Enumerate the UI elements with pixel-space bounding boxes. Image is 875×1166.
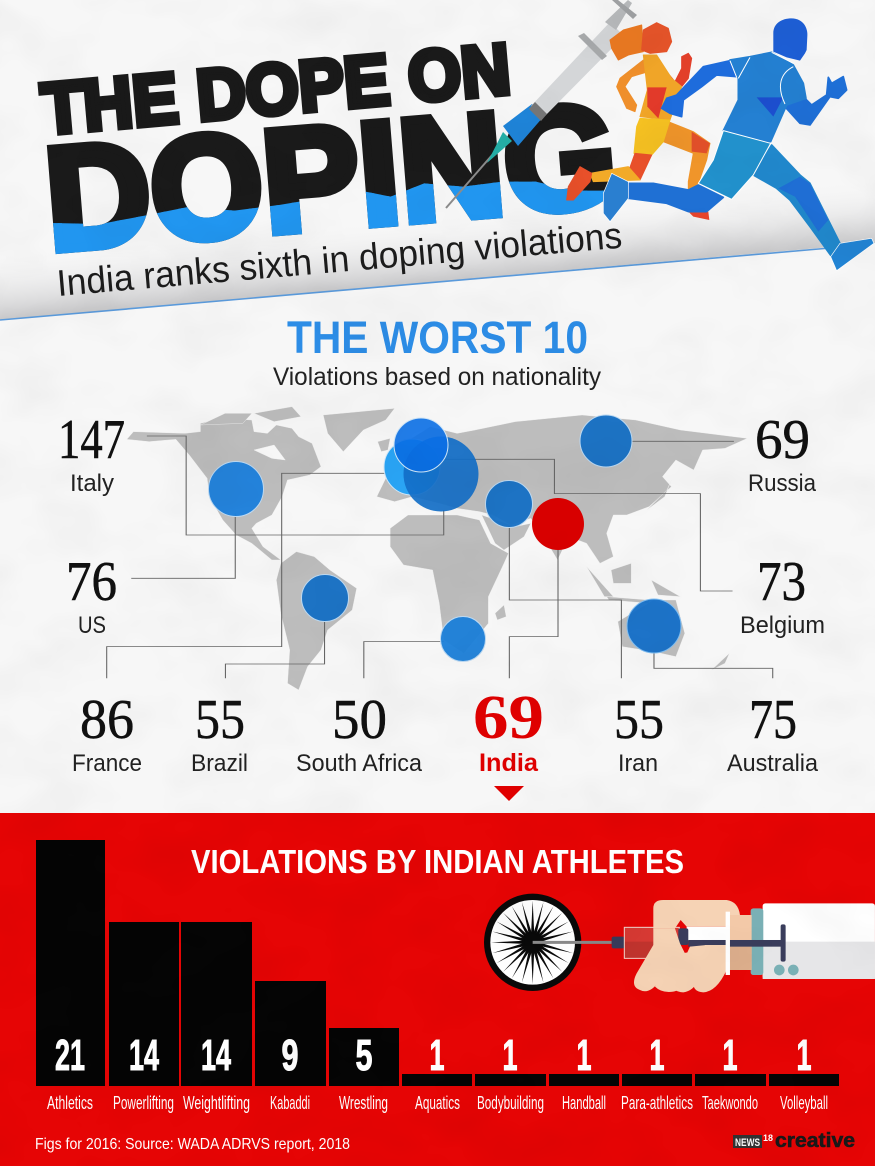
title: [37, 40, 613, 254]
icon: male runner: [603, 18, 874, 271]
stat: Italy: Italy: [70, 470, 114, 497]
blue band edge line: [0, 248, 830, 320]
bar: Para-athletics: Para-athletics: [621, 1093, 693, 1113]
icon: hand: [634, 900, 740, 992]
panel heading: VIOLATIONS BY INDIAN ATHLETES: [191, 843, 684, 880]
stat: Brazil: Brazil: [191, 750, 248, 777]
stat: South Africa: South Africa: [296, 750, 423, 777]
arrow: india pointer: [494, 786, 524, 801]
world map: [127, 407, 747, 690]
bar: Athletics: Athletics: [47, 1093, 93, 1113]
bar: Bodybuilding: 1: [502, 1031, 518, 1080]
bar: Kabaddi: [255, 981, 326, 1113]
bubble: India: [532, 498, 584, 550]
logo: news18 creative: creative: [775, 1130, 855, 1152]
bar: Volleyball: Volleyball: [780, 1093, 828, 1113]
stat: Brazil: 55: [195, 689, 245, 751]
bar: Wrestling: [329, 1028, 399, 1113]
bar: Weightlifting: Weightlifting: [183, 1093, 250, 1113]
source note: Figs for 2016: Source: WADA ADRVS report, 2018: [35, 1136, 350, 1153]
bar: Para-athletics: 1: [650, 1031, 664, 1080]
stat: India: 69: [473, 684, 544, 752]
paper background: [0, 0, 875, 813]
grey header band: [0, 174, 875, 320]
icon: syringe barrel: [533, 924, 786, 962]
bubble: Russia: [580, 415, 632, 467]
bar: Powerlifting: Powerlifting: [113, 1093, 174, 1113]
logo: news18 creative: NEWS: [735, 1137, 760, 1149]
bar: Aquatics: [402, 1031, 472, 1113]
panel: red section: [0, 813, 875, 1166]
bar chart: [36, 840, 839, 1113]
icon: ashoka chakra: [484, 894, 581, 991]
heading note: Violations based on nationality: [273, 363, 601, 391]
stat: Iran: [614, 689, 664, 777]
stat: South Africa: [296, 689, 423, 777]
bar: Aquatics: 1: [430, 1031, 444, 1080]
stat: Italy: 147: [58, 409, 125, 471]
bubble: France: [384, 439, 440, 495]
bar: Wrestling: 5: [356, 1031, 372, 1080]
stat: India: India: [479, 749, 539, 777]
connector lines: [107, 436, 773, 678]
logo: news18 creative: [733, 1130, 855, 1152]
bar: Weightlifting: 14: [201, 1031, 231, 1080]
stat: Australia: [727, 689, 819, 777]
title line 2 black: DOPING: [39, 73, 623, 281]
bar: Handball: Handball: [562, 1093, 606, 1113]
stat: Brazil: [191, 689, 248, 777]
title line 1: THE DOPE ON: [38, 29, 514, 150]
stat: Russia: 69: [755, 409, 810, 471]
bar: Handball: 1: [576, 1031, 592, 1080]
stat: Australia: Australia: [727, 750, 819, 777]
stat: Russia: [748, 409, 817, 497]
stat: Russia: Russia: [748, 470, 817, 497]
bubble: US: [208, 462, 264, 516]
bar: Aquatics: Aquatics: [415, 1093, 460, 1113]
bubble: South Africa: [440, 616, 486, 662]
bar: Weightlifting: [181, 922, 252, 1113]
bubble: Brazil: [302, 574, 348, 622]
bar: Kabaddi: 9: [282, 1031, 298, 1080]
bar: Bodybuilding: [475, 1031, 546, 1113]
stat: US: 76: [66, 551, 117, 613]
stat: Belgium: Belgium: [740, 612, 825, 639]
bar: Handball: [549, 1031, 619, 1113]
bubble: Australia: [627, 599, 681, 653]
stat: France: [72, 689, 142, 777]
bar: Wrestling: Wrestling: [339, 1093, 388, 1113]
stat: South Africa: 50: [332, 689, 387, 751]
stat: Belgium: 73: [757, 551, 806, 613]
bar: Para-athletics: [621, 1031, 693, 1113]
map bubbles: [208, 415, 681, 662]
stat: India: [473, 684, 544, 777]
bar: Volleyball: [769, 1031, 839, 1113]
bar: Taekwondo: [695, 1031, 766, 1113]
bar: Powerlifting: 14: [129, 1031, 159, 1080]
bar: Taekwondo: Taekwondo: [702, 1093, 758, 1113]
stat: US: US: [78, 612, 106, 639]
stat: Iran: 55: [614, 689, 664, 751]
stat: Iran: Iran: [618, 750, 658, 777]
stat: Italy: [58, 409, 125, 497]
icon: syringe: [446, 0, 637, 208]
heading: the worst 10: THE WORST 10: [287, 312, 588, 363]
bar: Taekwondo: 1: [722, 1031, 738, 1080]
logo: news18 creative: 18: [763, 1133, 773, 1143]
bar: Athletics: [36, 840, 105, 1113]
subtitle: India ranks sixth in doping violations: [55, 215, 624, 304]
title line 2 blue water: DOPING: [39, 73, 623, 281]
stat: Australia: 75: [749, 689, 797, 751]
stat: Belgium: [740, 551, 825, 639]
bubble: Iran: [486, 480, 532, 528]
stat: France: France: [72, 750, 142, 777]
bubble: Belgium: [394, 418, 448, 472]
icon: wrist: [727, 915, 752, 970]
icon: female runner: [567, 23, 710, 220]
stat: US: [66, 551, 117, 639]
bar: Athletics: 21: [55, 1031, 85, 1080]
bar: Kabaddi: Kabaddi: [270, 1093, 310, 1113]
bar: Volleyball: 1: [796, 1031, 812, 1080]
illustration: chakra and syringe hand: [484, 894, 875, 992]
stat: France: 86: [80, 689, 134, 751]
icon: coat sleeve: [751, 903, 875, 979]
bar: Bodybuilding: Bodybuilding: [477, 1093, 544, 1113]
bar: Powerlifting: [109, 922, 179, 1113]
bubble: Italy: [404, 436, 478, 512]
